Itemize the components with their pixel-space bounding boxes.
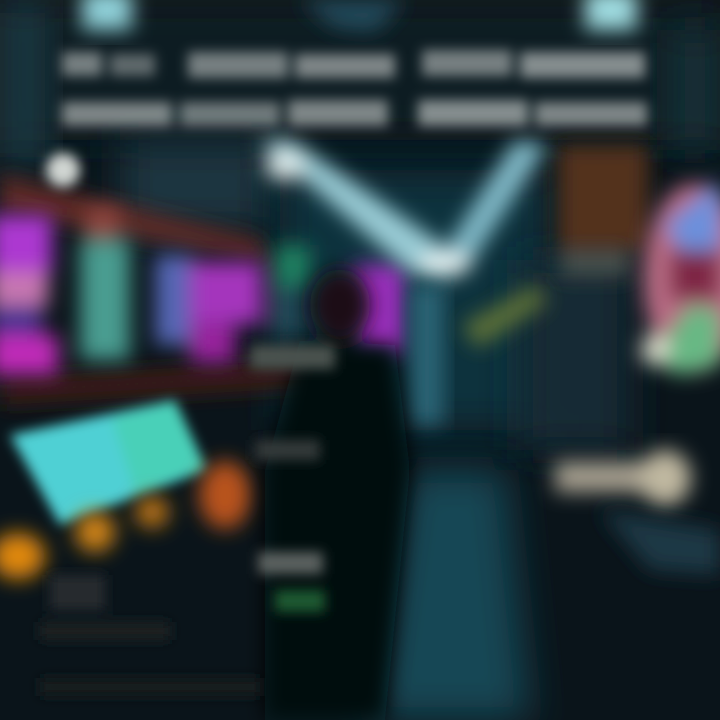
white spot lamp: [46, 153, 80, 187]
magenta screen behind figure: [352, 265, 404, 355]
orange lights: [0, 461, 251, 579]
left shelf band: [0, 175, 350, 405]
teal floor: [370, 470, 530, 720]
black silhouette figure: [265, 269, 410, 720]
cyan tablet: [10, 400, 207, 525]
ceiling lights: [82, 0, 637, 32]
teal column: [410, 285, 444, 425]
green-yellow sign: [462, 285, 548, 348]
left display screens: [0, 208, 310, 375]
small blurred labels: [40, 345, 335, 696]
brown wall panel: [558, 145, 648, 276]
light-blue V beams: [258, 140, 548, 282]
right teal table: [600, 510, 720, 575]
title: illegible blurred lines: [62, 50, 647, 126]
cream desk object: [555, 450, 691, 506]
right globe display: [641, 180, 720, 375]
